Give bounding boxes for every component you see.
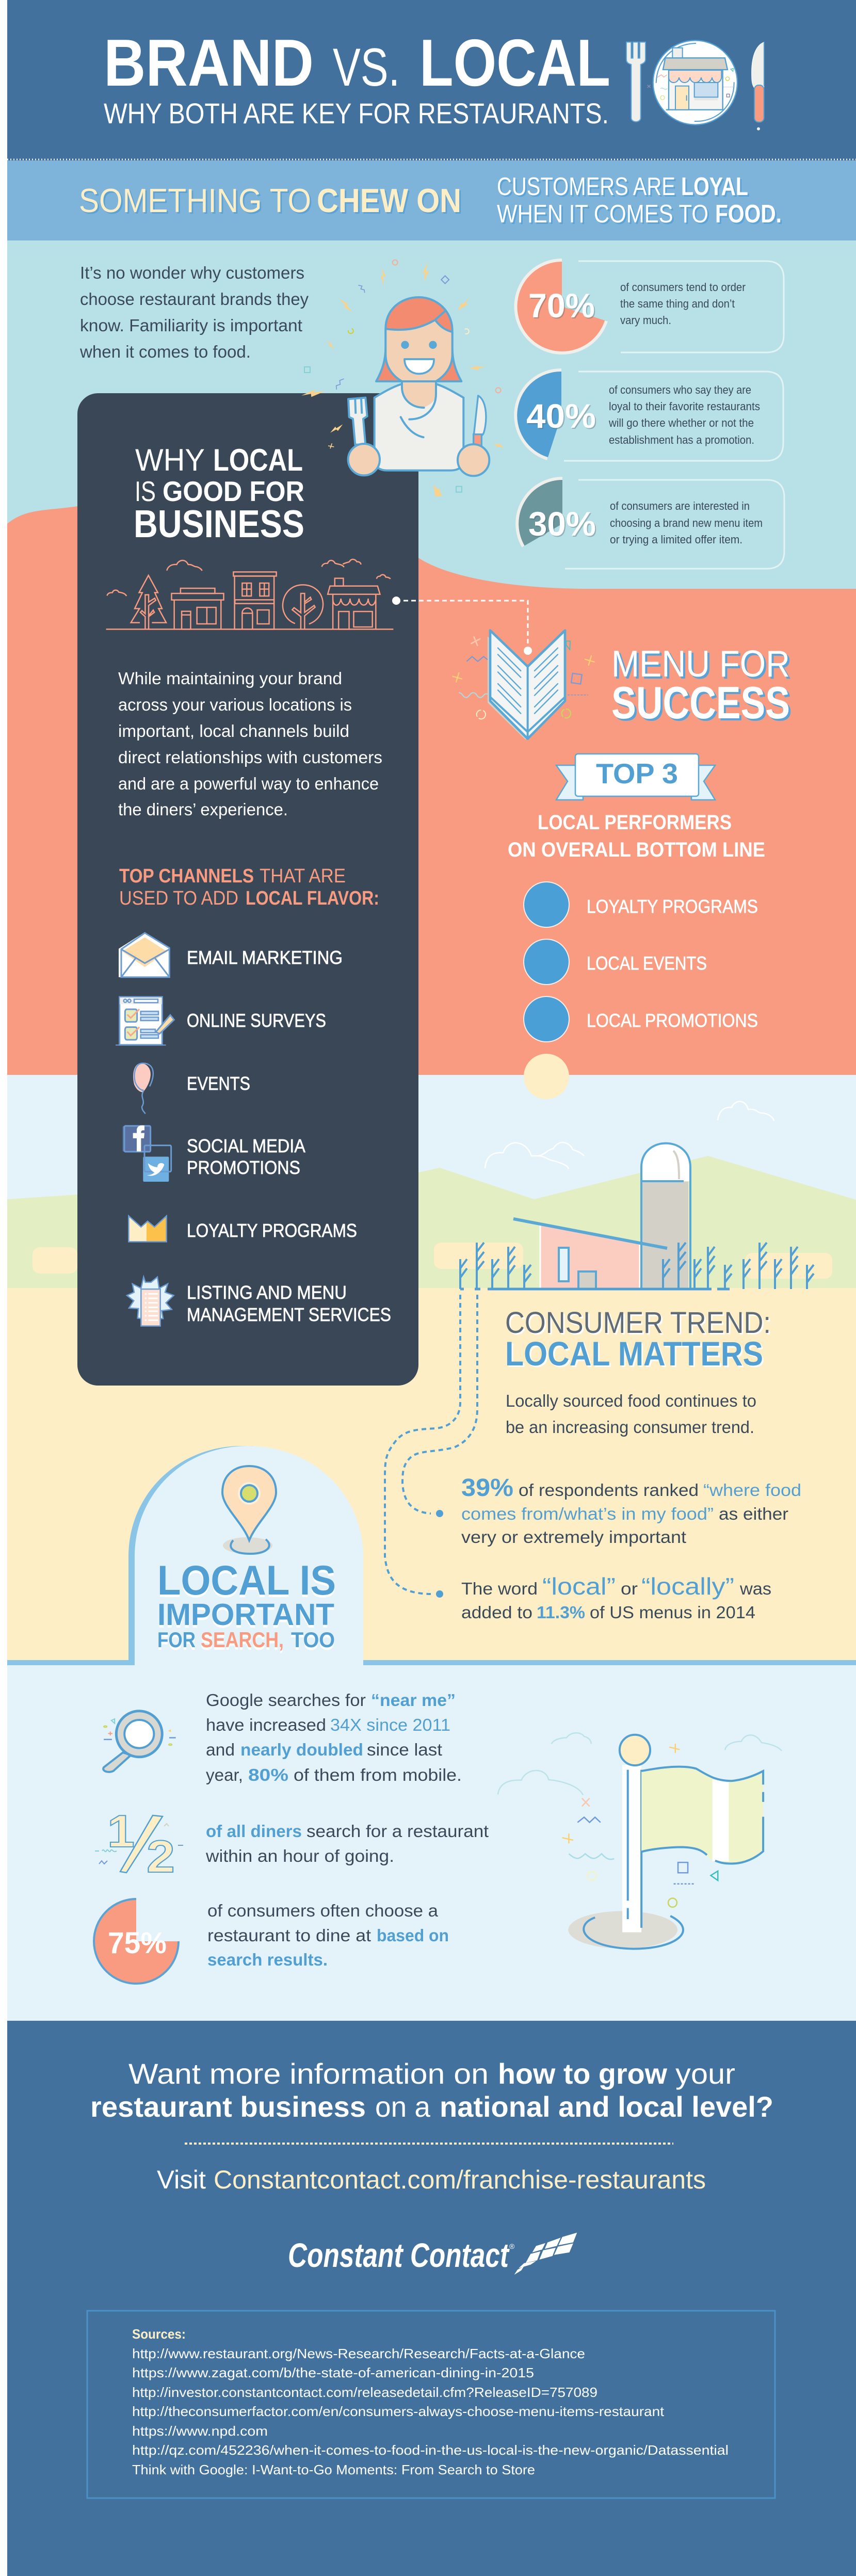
label: listing and menu management services <box>187 1282 391 1325</box>
subtitle: WHY BOTH ARE KEY FOR RESTAURANTS. <box>104 97 609 130</box>
search stat: 75% text: restaurant to dine at <box>207 1926 371 1945</box>
arch heading: FOR <box>157 1628 196 1652</box>
panel body text: the diners’ experience. <box>118 800 288 819</box>
title: LOCAL <box>419 26 610 100</box>
panel body text: important, local channels build <box>118 721 349 740</box>
intro text: when it comes to food. <box>79 342 251 361</box>
icon: crown <box>128 1216 167 1242</box>
panel heading: IS <box>135 475 156 507</box>
label: events: EVENTS <box>187 1073 250 1094</box>
band heading right: CUSTOMERS ARE <box>497 173 675 201</box>
stat: 30%: 30% <box>528 505 596 543</box>
panel: why local is good for business <box>77 393 418 1386</box>
stat: 11.3%: or <box>621 1579 638 1598</box>
stat: 40%: 40% <box>526 397 596 435</box>
illustration: farm <box>33 1101 832 1289</box>
ribbon: top 3: TOP 3 <box>596 758 678 790</box>
stat: 30%: choosing a brand new menu item <box>610 517 763 529</box>
cta text: national and local level? <box>440 2090 773 2123</box>
arch heading: IMPORTANT <box>157 1598 334 1632</box>
trend intro text: Locally sourced food continues to <box>506 1391 756 1410</box>
sources box: https://www.zagat.com/b/the-state-of-american-dining-in-2015 <box>132 2365 534 2380</box>
band heading left <box>79 182 461 219</box>
search stat: 75% text: search results. <box>207 1950 328 1969</box>
list: top performers <box>524 882 758 1099</box>
title: VS. <box>333 38 400 98</box>
search stat: near me: Google searches for <box>206 1691 366 1710</box>
intro text: choose restaurant brands they <box>80 289 309 309</box>
stat: 70% <box>515 260 784 353</box>
sources box: Think with Google: I-Want-to-Go Moments: From Search to Store <box>132 2462 535 2477</box>
icon: open menu book <box>453 631 594 739</box>
band heading right: FOOD. <box>715 200 782 228</box>
stat: 75% pie: 75% <box>108 1926 167 1960</box>
stat: 30%: of consumers are interested in <box>610 500 750 512</box>
top channels heading: THAT ARE <box>260 865 346 887</box>
search stat: 75% text: based on <box>377 1926 449 1945</box>
arch heading <box>157 1557 336 1652</box>
sources box: http://qz.com/452236/when-it-comes-to-food-in-the-us-local-is-the-new-organic/Datassential <box>132 2442 729 2458</box>
label: listing and menu management services: LISTING AND MENU <box>187 1282 347 1303</box>
visit link text: Visit <box>157 2165 206 2194</box>
stat: 70%: of consumers tend to order <box>620 281 746 294</box>
stat: 40%: loyal to their favorite restaurants <box>609 400 760 413</box>
stat: 70%: vary much. <box>620 314 671 327</box>
sources box: Sources: <box>132 2326 186 2342</box>
cta text: your <box>675 2057 735 2090</box>
heading: consumer trend: CONSUMER TREND: <box>505 1306 771 1340</box>
heading: menu for success <box>611 643 790 728</box>
icon: social media <box>123 1125 171 1182</box>
header <box>104 26 764 131</box>
stat: 39% <box>461 1474 801 1547</box>
heading: consumer trend: LOCAL MATTERS <box>505 1334 763 1373</box>
intro text <box>79 263 309 361</box>
visit link text: Constantcontact.com/franchise-restaurants <box>214 2165 706 2194</box>
stat: 70%: the same thing and don’t <box>620 297 735 310</box>
search stat: near me: of them from mobile. <box>294 1765 462 1784</box>
panel body text: across your various locations is <box>118 695 352 714</box>
arch: local is important for search <box>128 1446 363 1665</box>
search stat: near me: 34X since 2011 <box>330 1715 450 1734</box>
search stat: 75% text <box>207 1901 449 1969</box>
search stat: near me: have increased <box>206 1715 326 1734</box>
label: social media promotions: SOCIAL MEDIA <box>187 1135 305 1156</box>
title <box>104 26 610 100</box>
sources box: http://www.restaurant.org/News-Research/Research/Facts-at-a-Glance <box>132 2346 585 2361</box>
band heading right: LOYAL <box>681 173 748 201</box>
search stat: half of diners: within an hour of going. <box>205 1846 394 1865</box>
stat: 39%: of respondents ranked <box>519 1480 699 1500</box>
icon: map pin <box>222 1466 276 1554</box>
search stat: near me: 80% <box>248 1765 288 1784</box>
band heading right <box>497 173 782 228</box>
search stat: near me <box>206 1691 462 1784</box>
search stat: near me: “near me” <box>371 1691 456 1710</box>
icon: one half <box>95 1806 183 1882</box>
stat: 11.3%: “locally” <box>641 1573 734 1600</box>
top channels heading: LOCAL FLAVOR: <box>246 888 379 909</box>
search stat: half of diners: of all diners <box>206 1822 302 1841</box>
sources box <box>87 2311 775 2498</box>
icon: plate with restaurant, fork and knife <box>626 40 764 131</box>
trend intro text: be an increasing consumer trend. <box>506 1418 754 1437</box>
stat: 39%: 39% <box>461 1474 513 1502</box>
dashed connector endpoints <box>436 1510 443 1598</box>
stat: 39%: comes from/what’s in my food” <box>461 1504 714 1523</box>
cta text: restaurant business <box>90 2090 366 2123</box>
label: social media promotions <box>187 1135 305 1178</box>
logo: constant contact: Constant Contact <box>288 2236 510 2274</box>
panel heading: WHY <box>135 443 205 477</box>
stat: 11.3%: was <box>739 1579 771 1598</box>
title: BRAND <box>104 26 314 100</box>
intro text: It’s no wonder why customers <box>80 263 304 282</box>
stat: 40%: will go there whether or not the <box>608 416 754 429</box>
icon: online survey <box>116 997 174 1045</box>
label: listing and menu management services: MANAGEMENT SERVICES <box>187 1304 391 1325</box>
cta text: how to grow <box>498 2057 667 2090</box>
heading: menu for success: SUCCESS <box>611 677 790 728</box>
top channels heading: TOP CHANNELS <box>119 865 254 887</box>
stat: 39%: “where food <box>703 1480 801 1500</box>
icon: magnifying glass <box>103 1711 176 1772</box>
arch heading: LOCAL IS <box>157 1557 336 1604</box>
list: top performers: LOCAL EVENTS <box>587 953 707 974</box>
heading: local performers <box>508 811 765 861</box>
search stat: 75% text: of consumers often choose a <box>207 1901 439 1920</box>
sources box: http://investor.constantcontact.com/releasedetail.cfm?ReleaseID=757089 <box>132 2385 597 2400</box>
label: social media promotions: PROMOTIONS <box>187 1157 300 1178</box>
logo: constant contact: ® <box>509 2242 515 2250</box>
panel body text: While maintaining your brand <box>118 669 342 688</box>
stat: 11.3%: added to <box>461 1603 532 1622</box>
panel heading: GOOD FOR <box>163 475 304 507</box>
search stat: half of diners <box>205 1822 489 1865</box>
stat: 11.3%: of US menus in 2014 <box>590 1603 755 1622</box>
band heading left: CHEW ON <box>317 182 461 219</box>
panel body text: direct relationships with customers <box>118 748 382 767</box>
band heading left: SOMETHING TO <box>79 182 311 219</box>
stat: 11.3%: 11.3% <box>537 1603 585 1622</box>
stat: 40%: establishment has a promotion. <box>609 433 754 446</box>
search stat: near me: nearly doubled <box>240 1740 363 1759</box>
stat: 30%: or trying a limited offer item. <box>610 533 742 546</box>
stat: 11.3%: “local” <box>542 1573 616 1600</box>
top channels heading: USED TO ADD <box>119 888 238 909</box>
search stat: near me: since last <box>367 1740 442 1759</box>
sources box: http://theconsumerfactor.com/en/consumers-always-choose-menu-items-restaurant <box>132 2404 665 2419</box>
icon: one half: 2 <box>147 1831 175 1882</box>
dotted connector: town to menu <box>392 597 532 655</box>
heading: consumer trend <box>505 1306 771 1373</box>
icon: balloon <box>133 1063 153 1114</box>
stat: 39%: as either <box>719 1504 788 1523</box>
label: loyalty programs: LOYALTY PROGRAMS <box>187 1220 357 1241</box>
trend intro text <box>506 1391 756 1437</box>
arch heading: TOO <box>291 1628 335 1652</box>
icon: envelope <box>119 932 169 977</box>
cta text: on a <box>375 2090 431 2123</box>
arch heading: SEARCH, <box>201 1628 284 1652</box>
search stat: near me: and <box>206 1740 235 1759</box>
stat: 39%: very or extremely important <box>461 1527 686 1547</box>
intro text: know. Familiarity is important <box>80 316 302 335</box>
cta text <box>90 2057 773 2123</box>
band heading right: WHEN IT COMES TO <box>497 200 708 228</box>
panel heading <box>134 443 304 545</box>
label: email marketing: EMAIL MARKETING <box>187 947 343 968</box>
list: top performers: LOYALTY PROGRAMS <box>587 896 758 917</box>
label: online surveys: ONLINE SURVEYS <box>187 1010 326 1031</box>
stat: 70%: 70% <box>528 286 595 325</box>
heading: local performers: LOCAL PERFORMERS <box>538 811 732 834</box>
dashed connectors <box>385 1295 477 1594</box>
panel heading: LOCAL <box>213 443 303 477</box>
town line illustration <box>106 559 393 629</box>
icon: one half: 1 <box>107 1806 135 1857</box>
dotted divider <box>7 159 856 160</box>
stat: 40%: of consumers who say they are <box>609 383 751 396</box>
panel heading: BUSINESS <box>134 502 304 545</box>
ribbon: top 3 <box>556 754 715 800</box>
band: something to chew on <box>7 160 856 240</box>
panel body text <box>118 669 382 819</box>
search stat: near me: year, <box>206 1765 243 1784</box>
heading: menu for success: MENU FOR <box>611 643 790 685</box>
stat: 11.3%: The word <box>461 1579 538 1598</box>
footer call to action <box>87 2057 775 2498</box>
stat: 11.3% <box>461 1573 771 1622</box>
search stat: half of diners: search for a restaurant <box>306 1822 489 1841</box>
illustration: smiling woman with fork and knife <box>301 260 504 496</box>
stat: 40% <box>515 370 783 461</box>
stat: 75% pie <box>94 1899 179 1984</box>
heading: local performers: ON OVERALL BOTTOM LINE <box>508 839 765 861</box>
stat: 30% <box>517 478 784 569</box>
panel body text: and are a powerful way to enhance <box>118 774 379 793</box>
illustration: flag <box>498 1733 782 1949</box>
top channels heading <box>119 865 379 909</box>
cta text: Want more information on <box>128 2057 489 2090</box>
icon: listing <box>127 1277 174 1326</box>
list: top performers: LOCAL PROMOTIONS <box>587 1010 758 1031</box>
sources box: https://www.npd.com <box>132 2423 268 2439</box>
